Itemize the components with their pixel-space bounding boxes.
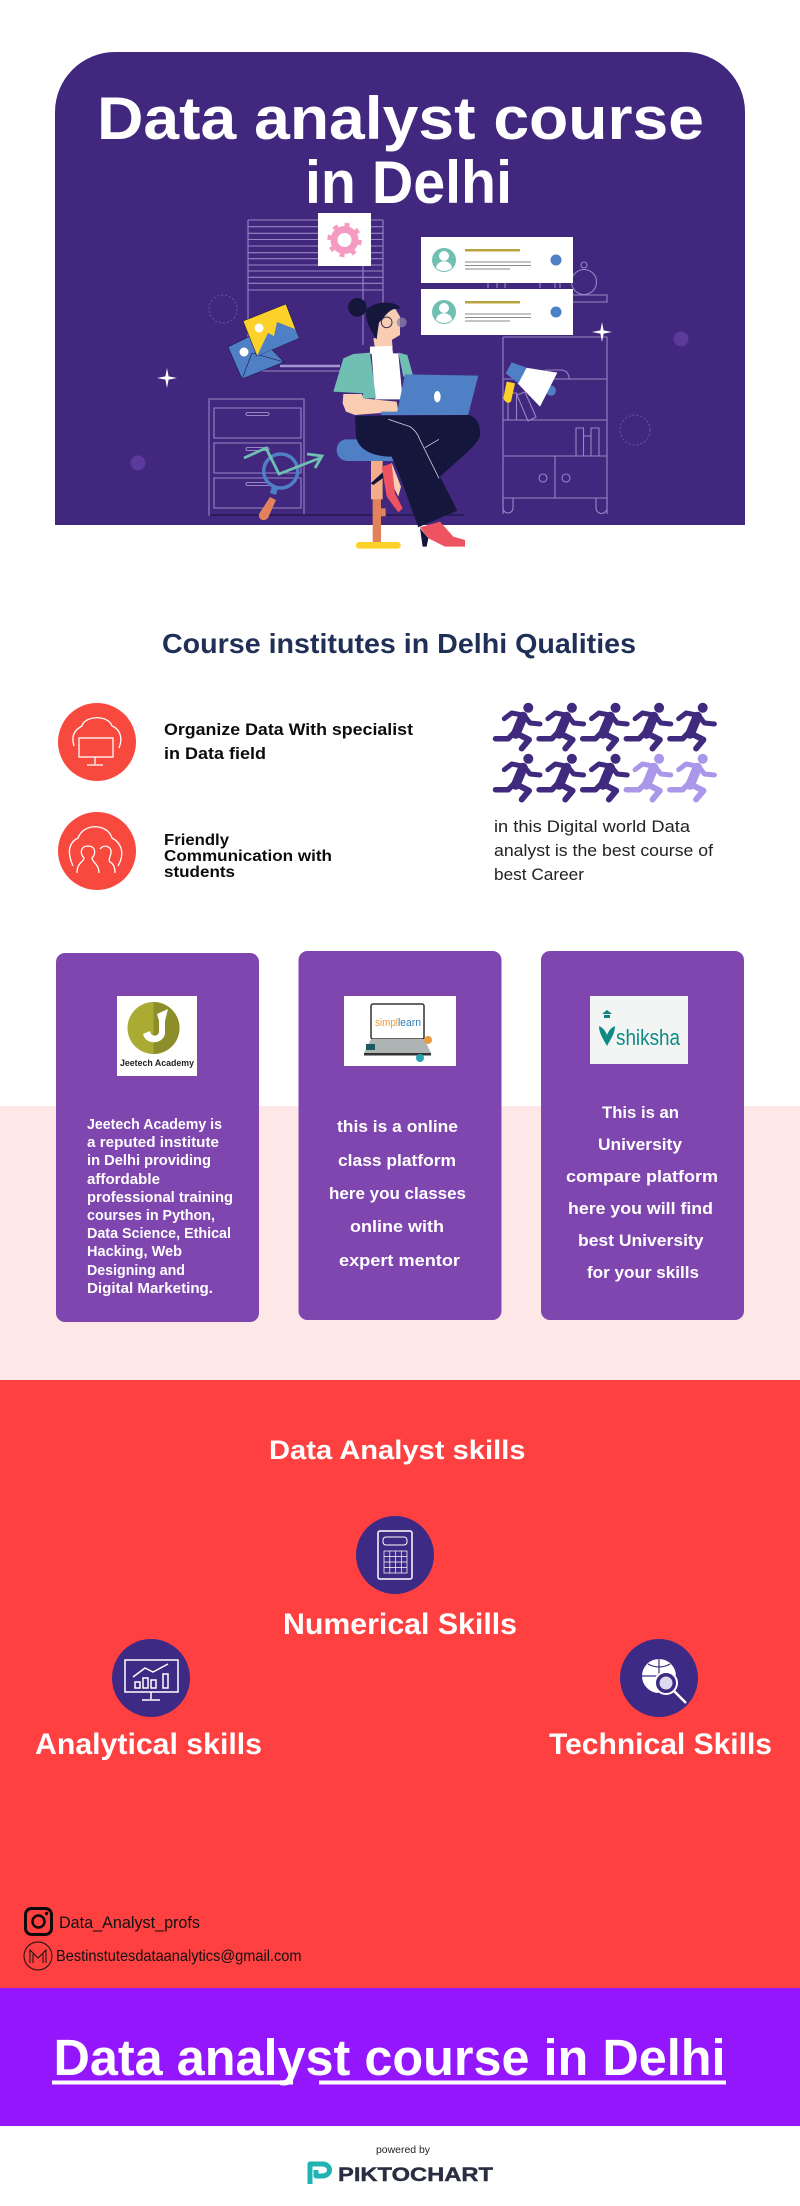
label: Technical Skills: Technical Skills	[549, 1728, 772, 1761]
text: Simplilearn description: expert mentor	[339, 1251, 460, 1270]
label: Analytical skills: Analytical skills	[35, 1728, 262, 1761]
title: Data analyst course	[97, 85, 704, 152]
logo: Simplilearn: learn	[398, 1017, 421, 1029]
text: Jeetech description: affordable	[87, 1171, 160, 1188]
logo: Jeetech Academy	[117, 996, 197, 1076]
section: qualities	[58, 628, 714, 890]
text: Shiksha description: best University	[578, 1231, 704, 1250]
icon: calculator	[356, 1516, 434, 1594]
text: digital world note: best Career	[494, 866, 585, 884]
logo: Shiksha: shiksha	[616, 1025, 681, 1050]
text: Shiksha description: This is an	[602, 1103, 679, 1122]
icon: globe search	[620, 1639, 698, 1717]
powered by: powered by	[376, 2144, 431, 2156]
text: digital world note: analyst is the best course of	[494, 842, 713, 860]
text: Simplilearn description	[329, 1117, 466, 1270]
text: friendly communication: students	[164, 864, 235, 881]
pink band	[0, 1106, 800, 1380]
panel: Shiksha card	[541, 951, 744, 1320]
contact: instagram: Data_Analyst_profs	[59, 1913, 200, 1932]
footer banner	[0, 1988, 800, 2126]
gear card	[318, 213, 371, 266]
logo: Simplilearn: simpl	[375, 1017, 398, 1029]
hero background	[55, 52, 745, 525]
text: Jeetech description: professional training	[87, 1189, 233, 1206]
text: Jeetech description: Hacking, Web	[87, 1243, 182, 1260]
icon: magnifier with trend arrow	[244, 448, 322, 520]
text: friendly communication	[164, 832, 332, 881]
text: Jeetech description: a reputed institute	[87, 1134, 219, 1151]
text: Jeetech description: Jeetech Academy is	[87, 1116, 222, 1133]
floor line	[210, 514, 464, 516]
text: Jeetech description: Digital Marketing.	[87, 1280, 213, 1297]
icon: piktochart mark	[310, 2164, 330, 2184]
text: Jeetech description: Data Science, Ethical	[87, 1225, 231, 1242]
contact: email: Bestinstutesdataanalytics@gmail.com	[56, 1948, 302, 1965]
text: Jeetech description: courses in Python,	[87, 1207, 215, 1224]
contact: instagram	[26, 1908, 200, 1934]
logo: Jeetech Academy: Jeetech Academy	[120, 1058, 194, 1068]
text: Shiksha description: here you will find	[568, 1199, 713, 1218]
decorative dots and sparkles	[130, 322, 688, 470]
text: Jeetech description	[87, 1116, 233, 1297]
panel: Simplilearn card	[298, 951, 502, 1320]
text: friendly communication: Friendly	[164, 832, 229, 849]
logo: Simplilearn	[344, 996, 456, 1066]
wordmark: PIKTOCHART	[338, 2164, 493, 2186]
decorative room line art	[209, 220, 607, 515]
profile card one	[421, 237, 573, 283]
text: friendly communication: Communication with	[164, 848, 332, 865]
text: organize data: in Data field	[164, 745, 266, 763]
icon: cloud people	[58, 812, 136, 890]
panel: Jeetech Academy card	[56, 953, 259, 1322]
title: in Delhi	[305, 149, 512, 216]
text: Simplilearn description: online with	[350, 1217, 444, 1236]
footer title: Data analyst course in Delhi	[54, 2029, 726, 2086]
window sill	[280, 365, 340, 367]
text: Simplilearn description: here you classes	[329, 1184, 466, 1203]
illustration: woman on stool with laptop	[333, 298, 480, 549]
icon: cloud monitor	[58, 703, 136, 781]
icon: picture cards	[228, 304, 299, 379]
heading: skills: Data Analyst skills	[269, 1435, 526, 1465]
text: Jeetech description: in Delhi providing	[87, 1152, 211, 1169]
contact: email	[24, 1942, 302, 1970]
section: Data Analyst skills	[0, 1380, 800, 1988]
title	[97, 85, 704, 216]
text: digital world note	[494, 818, 713, 884]
text: Shiksha description: University	[598, 1135, 683, 1154]
logo: Shiksha	[590, 996, 688, 1064]
text: Shiksha description	[566, 1103, 718, 1282]
icon: analytics monitor	[112, 1639, 190, 1717]
icon: megaphone	[503, 362, 557, 407]
decorative dashed circles	[209, 295, 650, 445]
footer underline	[52, 2080, 726, 2084]
text: Jeetech description: Designing and	[87, 1262, 185, 1279]
piktochart branding	[310, 2144, 493, 2186]
text: Simplilearn description: this is a online	[337, 1117, 458, 1136]
text: organize data	[164, 721, 414, 763]
profile card two	[421, 289, 573, 335]
text: Simplilearn description: class platform	[338, 1151, 456, 1170]
text: digital world note: in this Digital world Data	[494, 818, 691, 836]
heading: qualities: Course institutes in Delhi Qualities	[162, 628, 636, 659]
label: Numerical Skills: Numerical Skills	[283, 1608, 517, 1641]
text: organize data: Organize Data With specialist	[164, 721, 414, 739]
text: Shiksha description: for your skills	[587, 1263, 699, 1282]
pictogram: runners 8 of 10	[496, 703, 714, 800]
panel: hero	[55, 52, 745, 549]
text: Shiksha description: compare platform	[566, 1167, 718, 1186]
